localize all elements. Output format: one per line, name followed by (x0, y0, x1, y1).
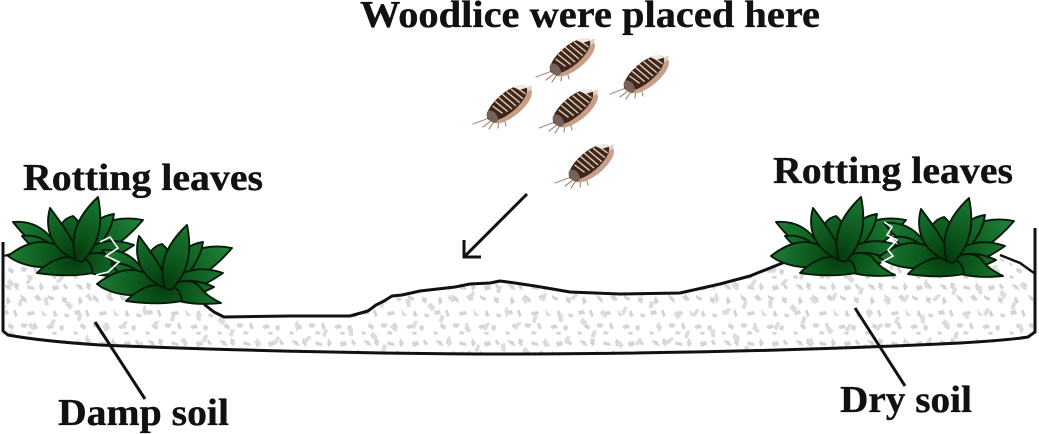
label: dry soil: Dry soil (840, 379, 972, 421)
label: rotting leaves left: Rotting leaves (23, 157, 263, 199)
right surface stub (1000, 255, 1034, 273)
label: rotting leaves right: Rotting leaves (773, 150, 1013, 192)
rotting leaves left (8, 197, 232, 304)
tray outline (3, 228, 1035, 354)
icon: woodlouse 3 (473, 76, 540, 131)
rotting leaves right (771, 197, 1014, 277)
plant 4 (879, 198, 1014, 277)
label: damp soil: Damp soil (58, 392, 229, 434)
soil surface line (205, 262, 785, 317)
woodlice group (473, 29, 677, 190)
arrow: drop towards the soil (464, 194, 527, 257)
icon: woodlouse 2 (610, 46, 677, 101)
left surface stub (4, 248, 20, 256)
plant 1 (8, 197, 143, 276)
icon: woodlouse 1 (536, 29, 603, 84)
leader line: dry soil (855, 308, 905, 386)
leader line: damp soil (95, 322, 145, 399)
plant 2 (97, 225, 232, 304)
icon: woodlouse 5 (555, 135, 622, 190)
icon: woodlouse 4 (539, 80, 606, 135)
soil fill (5, 258, 1033, 354)
plant 3 (771, 197, 906, 276)
soil tray (3, 228, 1035, 354)
